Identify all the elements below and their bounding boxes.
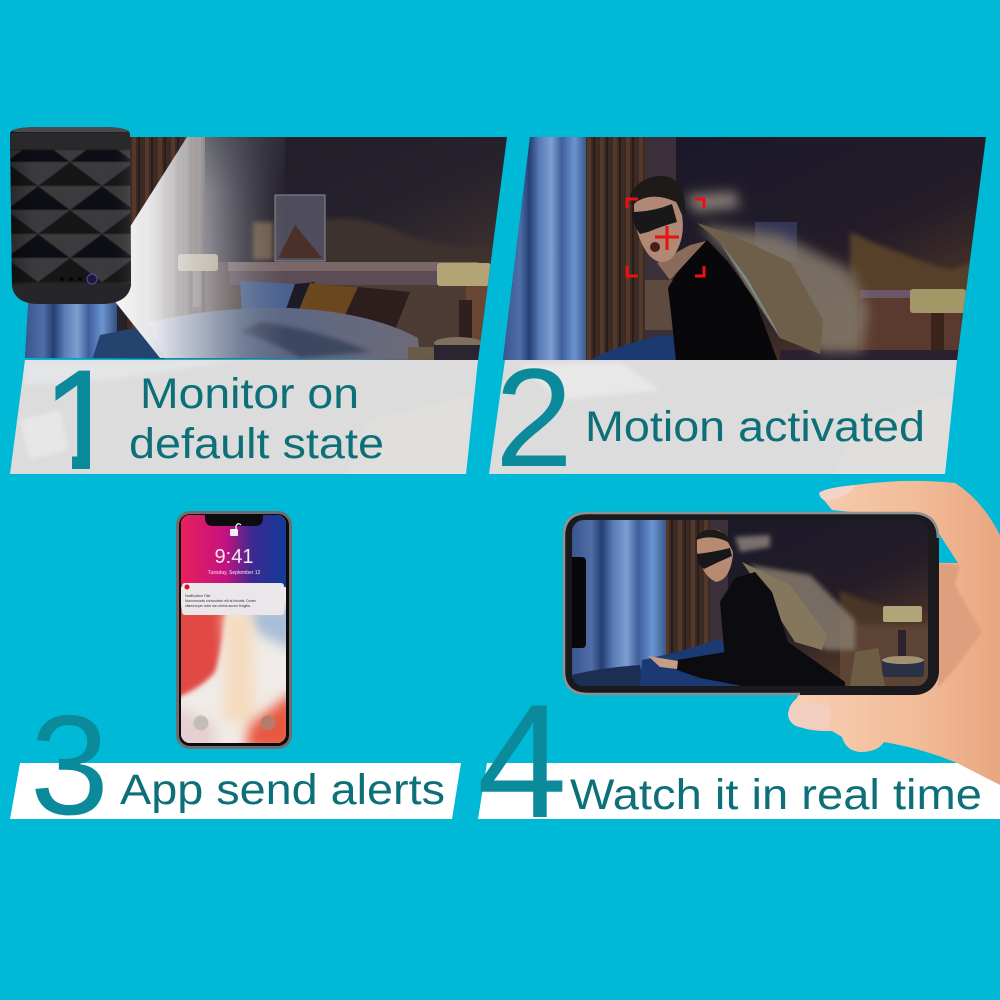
panel: step 2 label — [489, 360, 957, 474]
icon: phone with lock screen alert — [170, 511, 296, 750]
lock screen time: 9:41 — [215, 546, 253, 568]
phone body — [564, 512, 939, 695]
icon: black faceted cylinder camera — [8, 125, 133, 307]
alert notification: Notification Title — [185, 594, 210, 598]
number 2: 2 — [495, 339, 573, 496]
caption: monitor on default state — [129, 370, 384, 468]
panel: step 1 bedroom photo — [20, 137, 510, 363]
caption: monitor on default state: Monitor on — [140, 370, 359, 418]
caption: watch it in real time: Watch it in real time — [570, 771, 982, 819]
number 1: 1 — [43, 341, 121, 498]
intruder figure — [630, 176, 823, 362]
unlock icon — [230, 524, 241, 536]
lock screen date: Tuesday, September 12 — [208, 570, 261, 576]
second finger shadow — [938, 563, 982, 688]
caption: monitor on default state: default state — [129, 420, 384, 468]
caption: motion activated: Motion activated — [585, 403, 925, 451]
panel: step 3 label — [10, 686, 461, 845]
panel: step 2 intruder photo — [500, 137, 990, 362]
alert notification: ullamcorper nulla non metus auctor fringilla. — [185, 604, 251, 608]
alert notification: Nonummunis consectetur elit at lobortis. Donec — [185, 599, 256, 603]
camera light beam — [97, 137, 285, 358]
finger nail — [819, 485, 855, 501]
video of intruder on phone — [572, 520, 930, 690]
step 4 label band — [478, 763, 1000, 819]
caption: app send alerts: App send alerts — [120, 766, 445, 814]
step 4 number and caption — [477, 671, 982, 852]
motion trail on phone — [735, 535, 855, 650]
thumb nail — [788, 702, 831, 729]
wall painting — [275, 195, 325, 261]
number 3: 3 — [30, 686, 109, 845]
phone notch — [572, 557, 586, 648]
icon: hand holding phone — [564, 481, 1000, 785]
alert notification — [182, 583, 284, 615]
camera buttons and lens — [60, 274, 97, 284]
panel: step 1 label — [10, 360, 478, 474]
motion blur trail — [685, 192, 868, 352]
icon: red face-tracking reticle — [627, 199, 704, 276]
number 4: 4 — [477, 671, 567, 852]
